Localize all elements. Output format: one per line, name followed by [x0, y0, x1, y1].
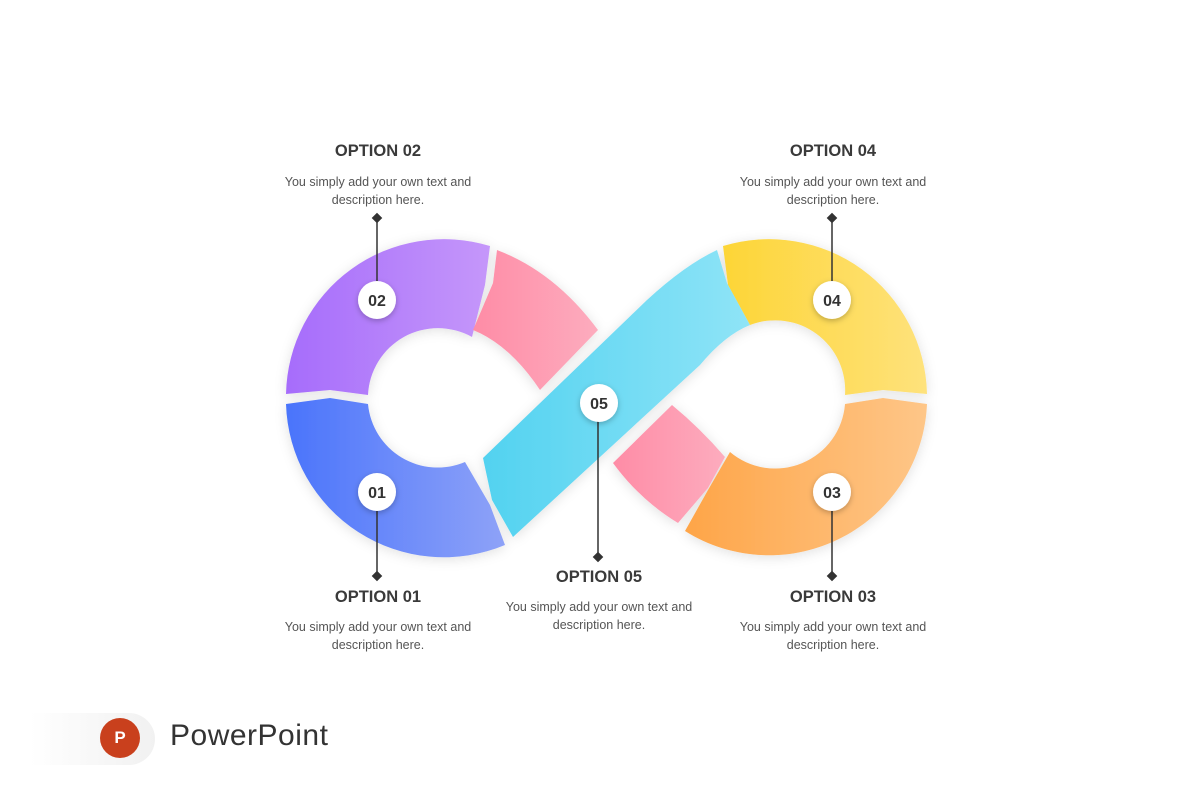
- text: option 02: OPTION 02: [335, 142, 421, 160]
- text: option 04: [740, 142, 926, 207]
- text: option 05: description here.: [553, 618, 645, 632]
- number badges: [358, 281, 851, 511]
- segment: pink right: [613, 405, 725, 523]
- text: option 01: OPTION 01: [335, 588, 421, 606]
- connector lines: [373, 214, 836, 580]
- text: option 03: OPTION 03: [790, 588, 876, 606]
- segments group: [286, 239, 927, 557]
- text: option 03: You simply add your own text and: [740, 620, 926, 634]
- logo: PowerPoint: [100, 713, 328, 765]
- segment: orange 03: [685, 398, 927, 555]
- segment: cyan 05: [483, 250, 750, 537]
- number badges: 03: [823, 485, 841, 502]
- number badges: 01: [368, 485, 386, 502]
- segment: purple 02: [286, 239, 490, 395]
- icon: powerpoint: [100, 718, 140, 758]
- text: option 02: [285, 142, 471, 207]
- segment: blue 01: [286, 398, 505, 557]
- text: option 02: description here.: [332, 193, 424, 207]
- text: option 01: You simply add your own text and: [285, 620, 471, 634]
- text: option 03: description here.: [787, 638, 879, 652]
- text: option 01: description here.: [332, 638, 424, 652]
- number badges: 04: [823, 293, 841, 310]
- logo: PowerPoint: PowerPoint: [170, 719, 328, 752]
- text: option 04: description here.: [787, 193, 879, 207]
- text: option 04: OPTION 04: [790, 142, 876, 160]
- text: option 05: You simply add your own text and: [506, 600, 692, 614]
- segment: pink left: [473, 250, 598, 390]
- icon: powerpoint: P: [114, 728, 126, 747]
- segment: yellow 04: [723, 239, 927, 395]
- text: option 04: You simply add your own text and: [740, 175, 926, 189]
- number badges: 05: [590, 396, 608, 413]
- text: option 02: You simply add your own text and: [285, 175, 471, 189]
- text: option 05: OPTION 05: [556, 568, 642, 586]
- number badges: 02: [368, 293, 386, 310]
- text: option 03: [740, 588, 926, 652]
- text: option 05: [506, 568, 692, 632]
- text: option 01: [285, 588, 471, 652]
